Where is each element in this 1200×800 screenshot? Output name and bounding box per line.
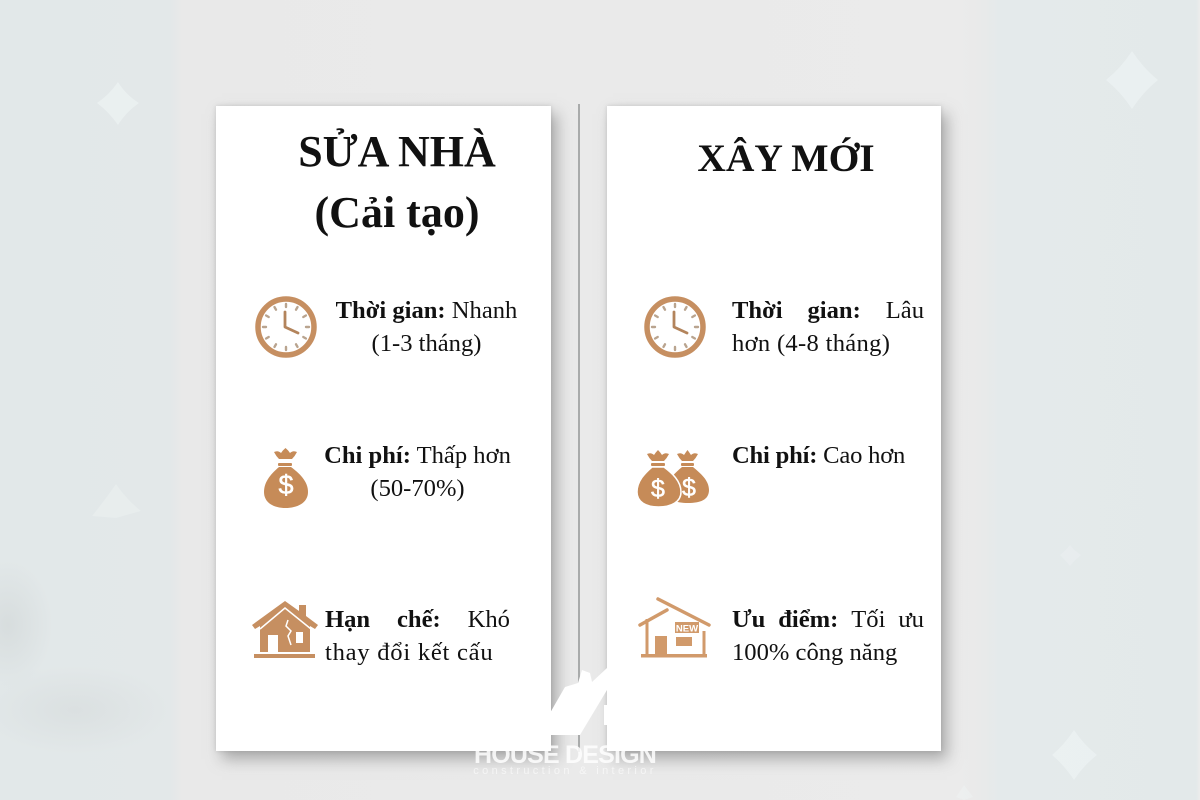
text: ưu điểm: Ưu — [732, 606, 765, 633]
heading: sửa nhà: SỬA NHÀ — [298, 127, 496, 176]
icon: cracked house — [252, 601, 318, 658]
icon: two money bags: $ — [682, 474, 696, 502]
logo tagline: construction & interior — [473, 765, 657, 777]
text: thời gian: hơn (4-8 tháng) — [732, 330, 890, 357]
text: thời gian: Thời — [732, 297, 783, 324]
watermark logo — [473, 668, 657, 777]
text: hạn chế: chế: — [397, 606, 441, 633]
text: hạn chế — [325, 606, 510, 666]
center divider — [578, 104, 580, 752]
icon: clock — [255, 296, 317, 358]
heading: sửa nhà: (Cải tạo) — [315, 188, 479, 237]
text: thời gian: gian: — [808, 297, 861, 324]
text: thời gian — [732, 297, 924, 357]
text: ưu điểm: 100% công năng — [732, 639, 897, 666]
panel: xây mới — [607, 106, 941, 751]
text: chi phí: (50-70%) — [370, 475, 465, 502]
heading: sửa nhà — [298, 127, 496, 237]
text: hạn chế: Khó — [468, 606, 510, 633]
panel: sửa nhà — [216, 106, 551, 751]
text: ưu điểm — [732, 606, 924, 666]
text: thời gian — [336, 297, 517, 357]
text: ưu điểm: ưu — [898, 606, 924, 633]
text: chi phí: Chi phí: Thấp hơn — [324, 442, 511, 469]
text: chi phí: Chi phí: Cao hơn — [732, 442, 905, 469]
text: hạn chế: thay đổi kết cấu — [325, 639, 493, 666]
text: thời gian: (1-3 tháng) — [372, 330, 481, 357]
text: ưu điểm: điểm: — [778, 606, 838, 633]
icon: money bag: $ — [278, 470, 294, 500]
text: hạn chế: Hạn — [325, 606, 370, 633]
heading: xây mới: XÂY MỚI — [697, 136, 875, 180]
logo mark — [551, 668, 607, 735]
text: chi phí — [324, 442, 511, 502]
icon: clock — [644, 296, 706, 358]
icon: two money bags — [638, 450, 709, 506]
icon: two money bags: $ — [651, 475, 665, 503]
text: thời gian: Thời gian: Nhanh — [336, 297, 517, 324]
icon: money bag — [264, 448, 308, 508]
text: ưu điểm: Tối — [851, 606, 885, 633]
logo name: HOUSE DESIGN — [474, 741, 656, 769]
text: thời gian: Lâu — [886, 297, 924, 324]
icon: new house: NEW — [676, 624, 698, 634]
icon: new house — [638, 597, 711, 658]
